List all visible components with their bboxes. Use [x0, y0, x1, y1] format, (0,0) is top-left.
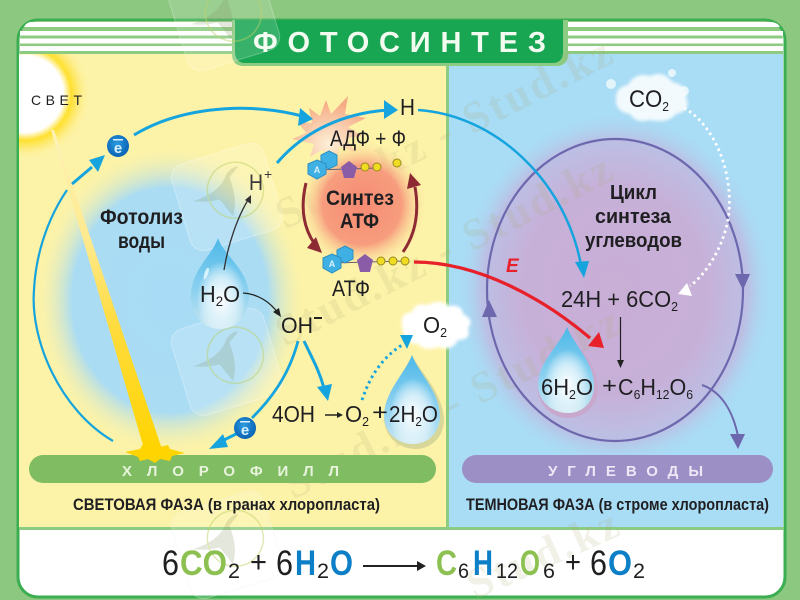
molecule: ADP: A: [314, 165, 321, 175]
molecule: ATP: A: [329, 259, 336, 269]
CO2 label: 2: [662, 99, 669, 114]
cycle arrow: right down: [735, 274, 750, 290]
carbohydrates bar: [462, 455, 773, 483]
chlorophyll bar: ХЛОРОФИЛЛ: [122, 463, 339, 480]
electron: bottom: [234, 417, 256, 439]
summary equation: C: [436, 544, 457, 583]
arrow: H2O to OH-: [243, 293, 281, 317]
arrow: products to carbohydrates: [702, 385, 745, 449]
H label: H: [400, 94, 415, 120]
light ray: [51, 130, 163, 452]
arrow head: to electron: [89, 155, 105, 172]
cycle ring: [487, 139, 743, 441]
cycle label: [585, 182, 682, 252]
arrow: OH- to electron: [209, 341, 298, 449]
ATP synthesis label: АТФ: [340, 210, 379, 233]
H+ label: H: [249, 170, 263, 195]
summary equation: 2: [228, 560, 240, 583]
summary equation: 6: [276, 544, 293, 583]
cycle label: синтеза: [595, 206, 672, 228]
water photolysis glow: [34, 144, 306, 456]
header stripes: [20, 21, 783, 54]
sun: [0, 28, 91, 160]
product formula: 6: [634, 387, 640, 402]
OH- label: OH: [281, 313, 313, 338]
dark phase formula: 24H + 6CO: [561, 286, 677, 312]
energy burst: [292, 96, 366, 160]
chlorophyll bar: [29, 455, 436, 483]
summary equation: H: [473, 544, 493, 583]
energy label: E: [506, 256, 520, 277]
water drop: H2O: [191, 238, 249, 329]
watermarks: Stud.kz - Stud.kz: [267, 143, 623, 356]
water photolysis label: Фотолиз: [100, 206, 183, 229]
carbon dioxide cloud: [606, 69, 689, 121]
product formula: O: [669, 374, 686, 400]
molecule: ADP: [308, 151, 401, 179]
molecule: ATP: [323, 246, 409, 273]
hydroxyl equation: 2: [362, 414, 369, 429]
arrow: electron to ATP burst: [134, 108, 313, 135]
panel: dark phase: [449, 54, 783, 527]
hydroxyl equation: [272, 399, 438, 429]
oxygen cloud: [402, 302, 471, 349]
electron: top: [107, 135, 129, 157]
water photolysis label: [100, 206, 183, 253]
arrow: CO2 to cycle dotted: [678, 108, 729, 296]
hydroxyl equation: 4OH: [272, 401, 315, 427]
water drop: 2H2O: [384, 355, 444, 449]
product formula: O: [576, 374, 593, 400]
summary equation: 6: [162, 544, 179, 583]
product formula: C: [618, 374, 635, 400]
H+ label: +: [264, 166, 272, 182]
arrow: reaction down: [617, 317, 624, 368]
summary equation: CO: [180, 544, 227, 583]
summary equation: [162, 544, 645, 583]
cycle label: углеводов: [585, 230, 682, 252]
cycle label: Цикл: [610, 182, 657, 204]
arrow: oxygen release dotted: [362, 335, 413, 400]
label: light: СВЕТ: [31, 92, 82, 108]
product formula: [541, 373, 693, 402]
arrow: H+ to H: [277, 100, 398, 163]
summary equation: 2: [633, 560, 645, 583]
O2 label: O: [423, 312, 441, 338]
ATP synthesis label: Синтез: [326, 187, 394, 210]
summary equation: O: [608, 544, 632, 583]
CO2 label: CO: [629, 86, 665, 113]
watermarks: [165, 0, 631, 600]
product formula: 12: [656, 387, 669, 402]
burst on chlorophyll: [125, 442, 185, 463]
cycle arrow: left up: [482, 300, 497, 317]
hydroxyl equation: O: [422, 401, 438, 427]
summary equation: 12: [496, 560, 518, 583]
hydroxyl equation: 2H: [389, 401, 418, 427]
title: ФОТОСИНТЕЗ: [253, 27, 546, 59]
H2O formula: 2: [216, 293, 223, 309]
H+ label: [249, 166, 272, 195]
arrow: H2O to H+: [224, 195, 251, 270]
carbohydrate cycle glow: [457, 112, 773, 468]
summary equation: +: [250, 546, 267, 579]
product formula: 6: [686, 387, 693, 402]
arrow: H to cycle: [418, 110, 589, 278]
summary equation: 6: [590, 544, 607, 583]
summary equation: 6: [543, 560, 555, 583]
ATP synthesis label: [326, 187, 394, 233]
panel: light phase: [19, 54, 448, 527]
title banner: [232, 20, 568, 66]
ADP + P label: АДФ + Ф: [330, 126, 406, 151]
arrow: cycle up: [403, 173, 421, 252]
electron: bottom: e: [241, 422, 249, 439]
hydroxyl equation: O: [345, 401, 363, 427]
product formula: H: [640, 374, 656, 400]
summary equation: 2: [317, 560, 329, 583]
summary equation: O: [520, 544, 540, 583]
hydroxyl equation: 2: [415, 414, 422, 429]
arrow: OH- to 4OH: [304, 341, 332, 401]
product formula: +: [602, 373, 617, 398]
arrow: energy: [414, 262, 604, 348]
summary equation: H: [295, 544, 316, 583]
ATP label: АТФ: [332, 276, 370, 301]
O2 label: 2: [440, 325, 447, 340]
hydroxyl equation: +: [372, 399, 388, 425]
H2O formula: H: [200, 281, 217, 307]
watermarks: Stud.kz - Stud.kz: [267, 26, 623, 239]
arrow: electron to chlorophyll arc: [34, 167, 113, 441]
product formula: 6H: [541, 374, 570, 400]
caption: light phase: СВЕТОВАЯ ФАЗА (в гранах хлоропласта): [73, 495, 380, 514]
summary equation: 6: [458, 560, 469, 583]
phase dividers: [19, 54, 784, 530]
product formula: 2: [569, 387, 576, 402]
water drop: 6H2O: [538, 327, 598, 418]
summary equation: +: [565, 546, 581, 579]
water photolysis label: воды: [118, 230, 165, 253]
carbohydrates bar: УГЛЕВОДЫ: [548, 463, 703, 480]
summary equation: O: [330, 544, 353, 583]
dark phase formula: 2: [671, 299, 678, 314]
H2O formula: O: [223, 281, 240, 307]
glow: ATP synthesis: [296, 139, 428, 271]
electron: top: e: [114, 140, 122, 157]
arrow: summary reaction: [363, 561, 426, 571]
watermarks: Stud.kz - Stud.kz: [275, 296, 631, 509]
arrow: cycle down: [303, 183, 322, 253]
